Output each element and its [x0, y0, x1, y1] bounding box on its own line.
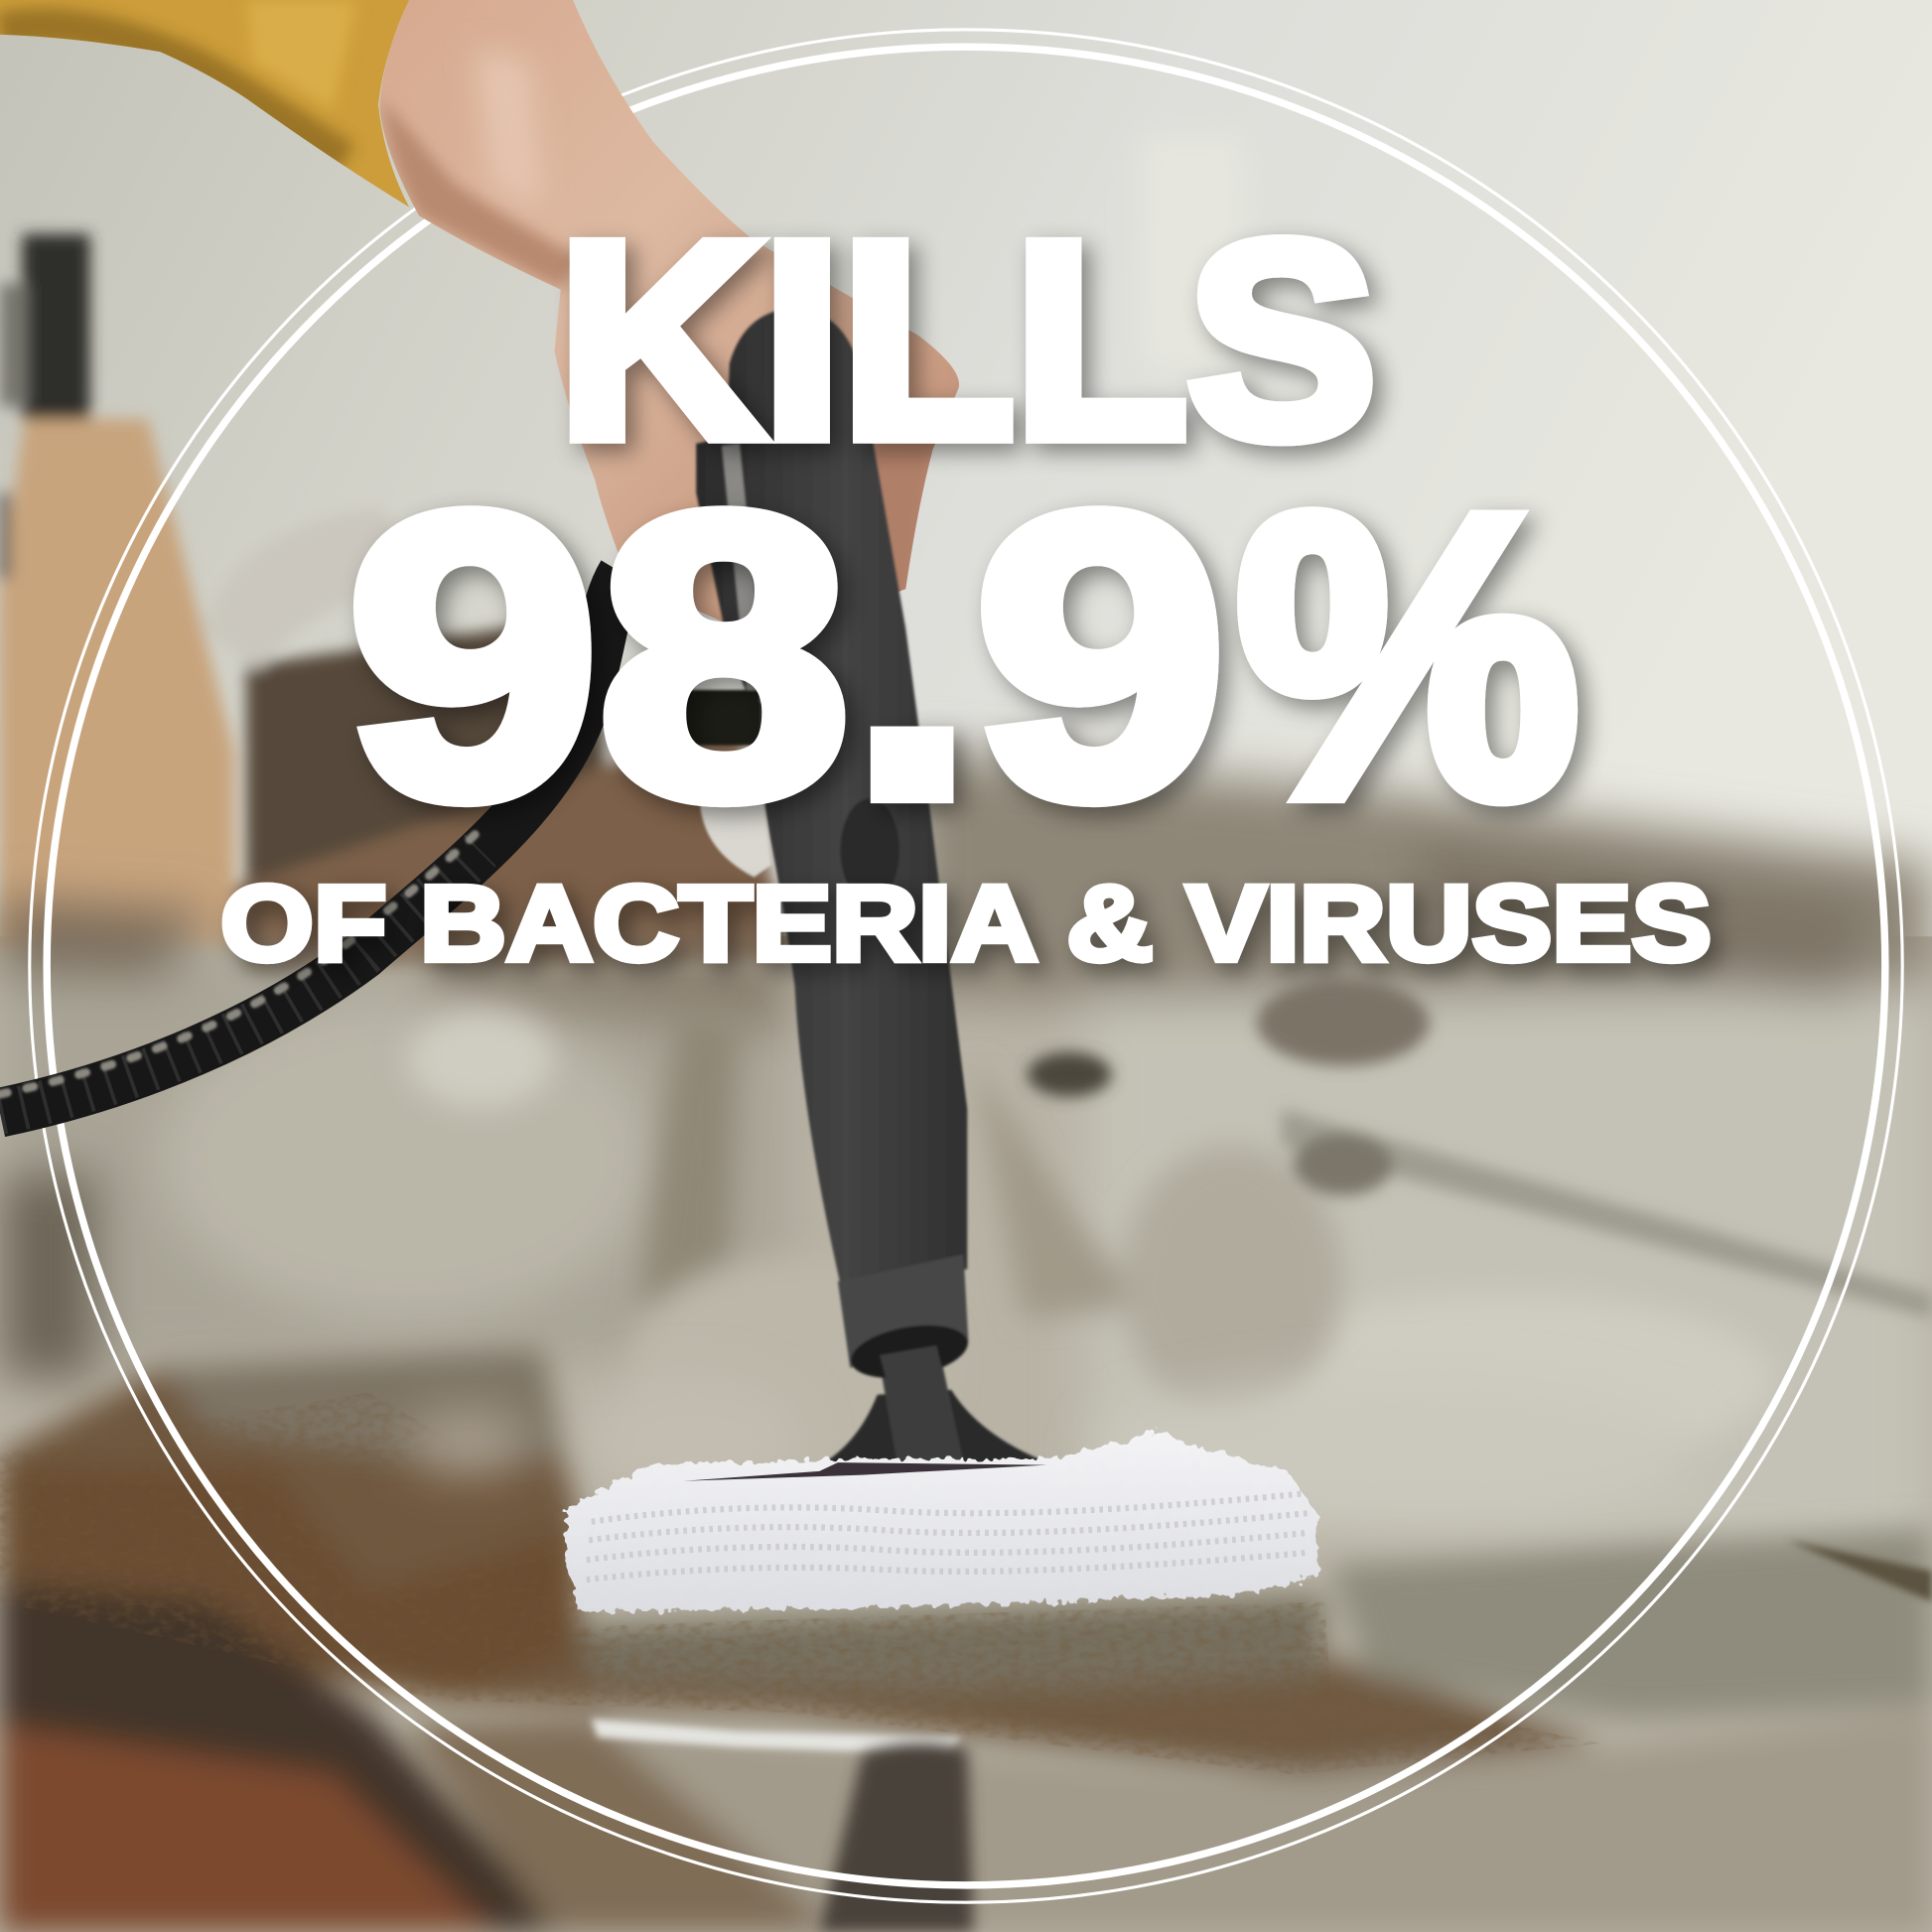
- headline: 98.9%: [347, 431, 1580, 880]
- steam mop handle: [684, 308, 1047, 1468]
- microfiber cleaning pad: [564, 1430, 1318, 1611]
- headline: 98.9%: %: [1236, 431, 1580, 880]
- headline: 98.9%: 98.9: [347, 431, 1226, 880]
- headline: KILLS: KILLS: [558, 185, 1376, 495]
- arm and hand: [369, 0, 973, 653]
- yellow sleeve: [0, 0, 419, 209]
- steam hose: [0, 573, 622, 1113]
- subheading: of bacteria and viruses: OF BACTERIA & VIRUSES: [220, 863, 1712, 983]
